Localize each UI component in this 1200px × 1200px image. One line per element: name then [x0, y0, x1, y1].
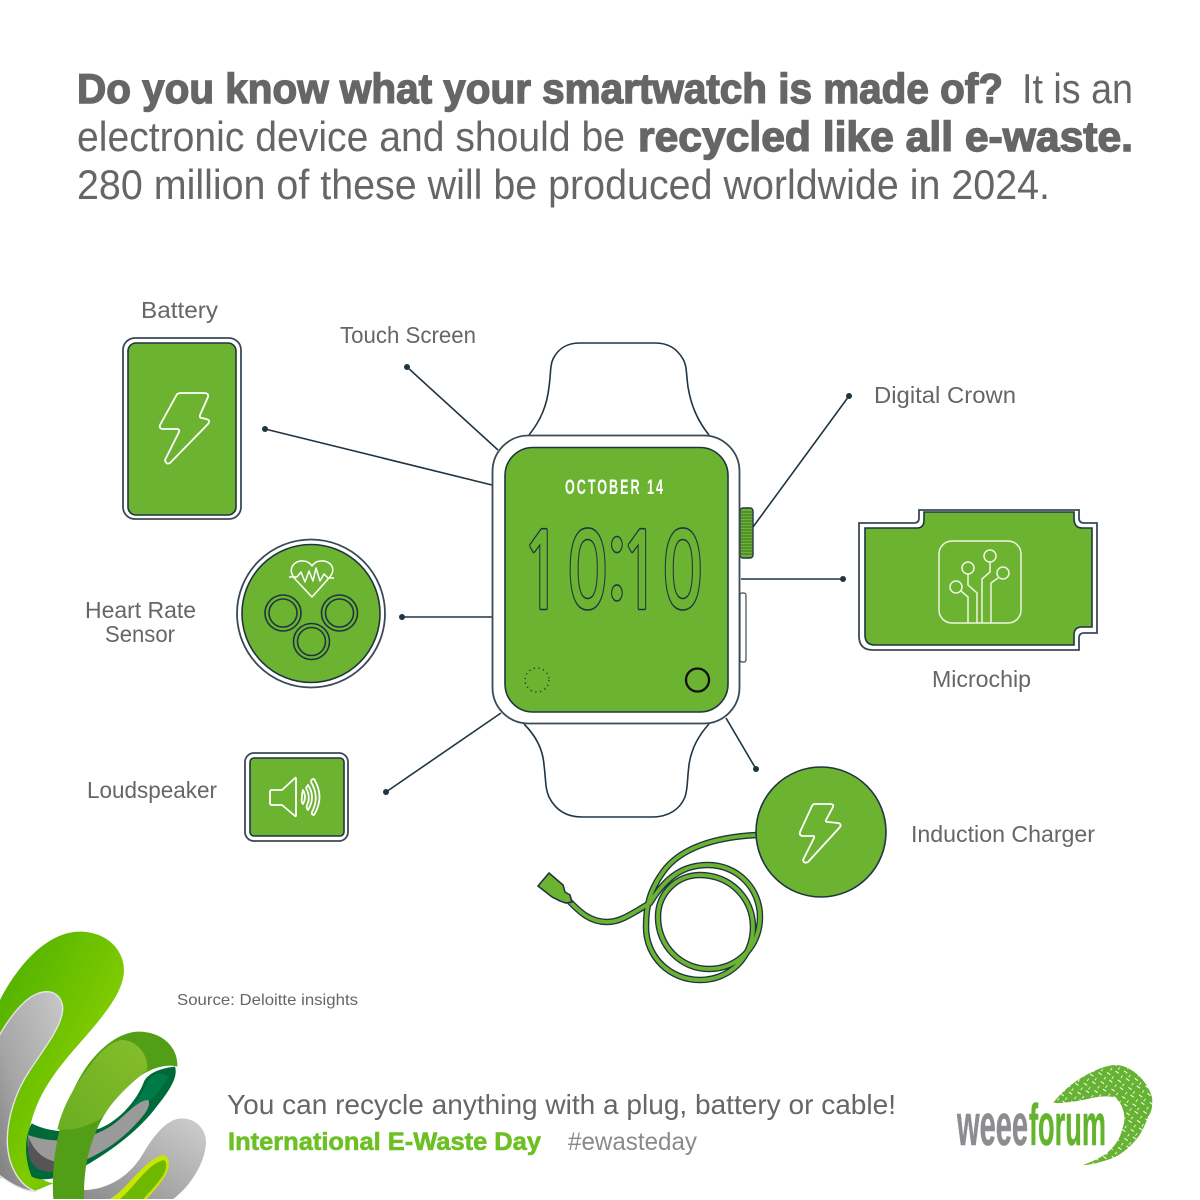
lime accent [110, 1155, 169, 1199]
cable [570, 835, 760, 980]
big green swoosh [0, 932, 124, 1192]
icon: circuit [939, 541, 1021, 623]
leader line: induction charger [726, 718, 759, 772]
icon: heart with pulse [289, 561, 334, 597]
leader line: heart rate sensor [399, 614, 492, 620]
leader line: microchip [741, 576, 846, 582]
logo: weeeforum [956, 1065, 1152, 1165]
leader line: battery [262, 426, 492, 485]
heading line 1: Do you know what your smartwatch is made of? [77, 65, 1003, 112]
logo wordmark: weee [956, 1093, 1028, 1158]
digital crown [740, 508, 753, 558]
label: battery: Battery [141, 297, 219, 323]
label: loudspeaker: Loudspeaker [87, 777, 217, 803]
induction charger [538, 767, 886, 980]
label: heart rate sensor: Heart Rate [85, 597, 196, 623]
event name: International E-Waste Day [228, 1128, 541, 1156]
label: heart rate sensor: Sensor [105, 621, 175, 647]
heading line 2 [77, 113, 1133, 160]
large grey swoosh [0, 992, 63, 1192]
icon: lightning bolt [800, 804, 841, 863]
battery [123, 338, 241, 519]
heading line 2: electronic device and should be [77, 113, 625, 160]
loudspeaker [245, 753, 348, 841]
logo: weeeforum: forum [1029, 1093, 1106, 1158]
top strap [529, 343, 709, 435]
lower right grey swoosh [83, 1118, 206, 1199]
dotted indicator [525, 668, 549, 692]
heading line 3: 280 million of these will be produced worldwide in 2024. [77, 161, 1050, 208]
label: touch screen: Touch Screen [340, 322, 476, 348]
dark grey shadow [28, 1137, 57, 1171]
label: microchip: Microchip [932, 666, 1031, 692]
time: 10:10 [521, 520, 704, 626]
leader line: digital crown [753, 393, 852, 527]
hashtag: #ewasteday [568, 1128, 697, 1156]
smartwatch [492, 343, 753, 817]
decorative e-waste day logo [0, 932, 206, 1199]
watch screen [505, 448, 728, 712]
dark inner band [26, 1067, 176, 1179]
ring highlight [57, 1040, 147, 1130]
ring indicator [686, 668, 709, 692]
source note: Source: Deloitte insights [177, 992, 358, 1009]
bottom strap [524, 724, 709, 817]
watch case [492, 436, 740, 724]
sensor circles [265, 595, 358, 660]
front green ring [53, 1032, 177, 1199]
date: OCTOBER 14 [565, 475, 665, 499]
label: digital crown: Digital Crown [874, 382, 1016, 408]
icon: lightning bolt [160, 393, 209, 464]
leader line: loudspeaker [383, 713, 501, 795]
microchip [859, 510, 1097, 650]
label: induction charger: Induction Charger [911, 821, 1095, 847]
plug [538, 873, 572, 903]
logo crescent [1053, 1065, 1152, 1165]
charger disc [756, 767, 886, 897]
icon: speaker [270, 778, 320, 816]
lighter band highlight [100, 1074, 168, 1137]
side button [740, 593, 746, 662]
heading [77, 65, 1133, 208]
bottom tagline: You can recycle anything with a plug, battery or cable! [227, 1089, 896, 1120]
leader line: touch screen [404, 364, 498, 450]
inner grey band [28, 1100, 149, 1172]
heart rate sensor [237, 540, 385, 688]
heading line 1: It is an [1022, 65, 1133, 112]
heading line 2: recycled like all e-waste. [638, 113, 1133, 160]
label: heart rate sensor [85, 597, 196, 647]
